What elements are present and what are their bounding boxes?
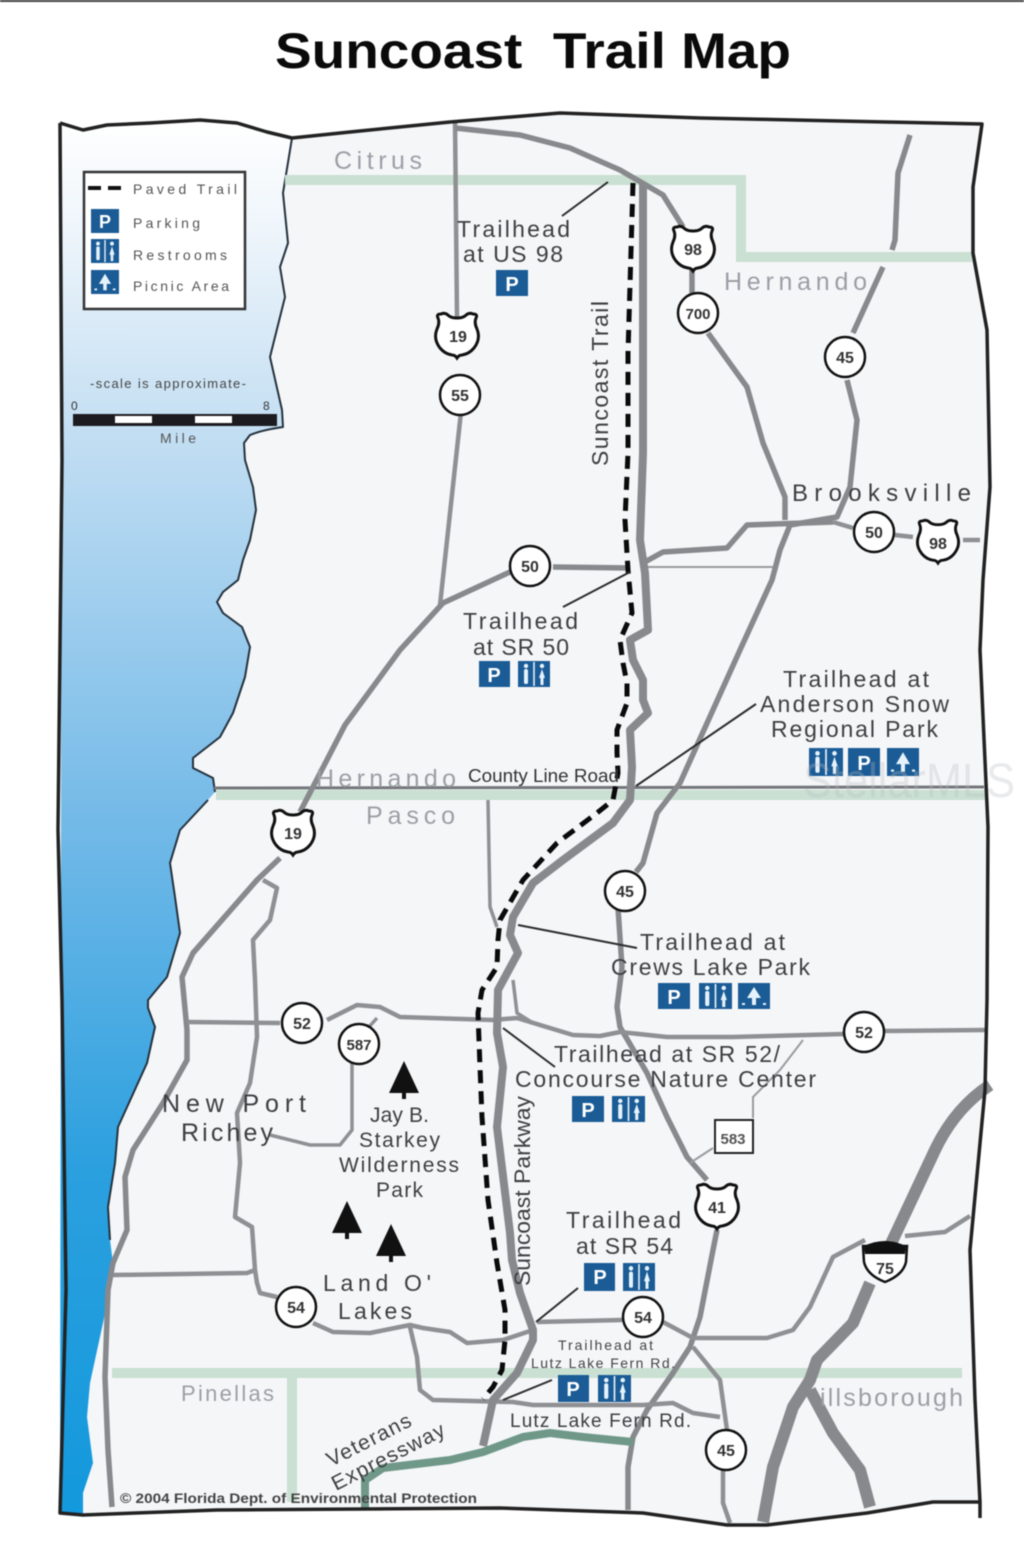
label: Trailhead at Anderson Snow Regional Park (760, 666, 949, 776)
label: Suncoast Trail (vertical): Suncoast Trail (587, 301, 613, 466)
legend: P (99, 212, 111, 232)
label: Trailhead at SR 54 (566, 1207, 681, 1291)
route markers: 75 (876, 1261, 894, 1278)
route markers: 50 (521, 559, 539, 576)
leader lines (503, 182, 756, 1400)
label: Trailhead at SR 52 / Concourse Nature Center (515, 1041, 816, 1122)
scale bar: 0 (71, 399, 78, 413)
route markers: 45 (836, 350, 854, 367)
label: Land O' Lakes (323, 1270, 431, 1324)
scale bar: -scale is approximate- (90, 376, 246, 391)
route markers: 54 (634, 1310, 652, 1327)
label: Trailhead at Lutz Lake Fern Rd.: Lutz Lake Fern Rd. (531, 1355, 675, 1371)
scale bar: Mile (160, 430, 196, 446)
water: Gulf of Mexico (60, 120, 292, 1514)
label: Jay B. Starkey Wilderness Park: Wilderness (339, 1154, 459, 1177)
county labels: Hernando (316, 765, 456, 793)
route markers: 45 (717, 1443, 735, 1460)
legend: Restrooms (133, 247, 227, 263)
label: Lutz Lake Fern Rd.: Lutz Lake Fern Rd. (510, 1411, 691, 1432)
label: Trailhead at Crews Lake Park (611, 929, 810, 1009)
label: Trailhead at Anderson Snow Regional Park: Regional Park (771, 716, 938, 742)
scale bar (71, 376, 277, 446)
label: Suncoast Parkway (vertical): Suncoast Parkway (510, 1096, 535, 1286)
label: Jay B. Starkey Wilderness Park: Park (376, 1179, 424, 1202)
label: Trailhead at Anderson Snow Regional Park: Trailhead at (783, 666, 930, 692)
label: Jay B. Starkey Wilderness Park (339, 1104, 459, 1202)
label: New Port Richey: New Port (162, 1090, 306, 1118)
road network (105, 120, 990, 1523)
scale bar: 8 (263, 399, 270, 413)
label: County Line Road: County Line Road (468, 766, 619, 786)
label: Trailhead at SR 52 / Concourse Nature Center: Trailhead at SR 52/ (554, 1041, 781, 1067)
county labels: Pinellas (181, 1381, 274, 1406)
label: Trailhead at SR 52 / Concourse Nature Center: Concourse Nature Center (515, 1066, 816, 1092)
county labels: Pasco (366, 802, 455, 830)
legend: Paved Trail (133, 181, 237, 197)
label: Jay B. Starkey Wilderness Park: Jay B. (370, 1104, 429, 1127)
coastline outline (108, 138, 292, 1240)
route markers: 54 (287, 1300, 305, 1317)
label: Trailhead at Crews Lake Park: P (667, 987, 681, 1009)
label: Trailhead at SR 50: at SR 50 (473, 634, 569, 660)
Suncoast Parkway road (483, 183, 648, 1446)
label: Trailhead at US 98: at US 98 (463, 241, 563, 267)
label: Trailhead at SR 54: at SR 54 (576, 1233, 673, 1259)
legend (84, 172, 245, 309)
route markers: 98 (684, 242, 702, 259)
copyright: © 2004 Florida Dept. of Environmental Protection (120, 1490, 477, 1506)
paved trail: dashed line (478, 183, 633, 1399)
legend: Picnic Area (133, 278, 229, 294)
label: Trailhead at SR 50 (463, 608, 578, 687)
label: Trailhead at US 98 (457, 216, 570, 296)
label: Brooksville: Brooksville (792, 480, 971, 507)
route markers: 50 (865, 525, 883, 542)
county boundaries (112, 180, 985, 1502)
label: New Port Richey (162, 1090, 306, 1147)
route markers: 19 (284, 826, 302, 843)
label: Trailhead at Crews Lake Park: Trailhead at (640, 929, 786, 955)
label: Trailhead at SR 52 / Concourse Nature Center: P (581, 1100, 595, 1122)
label: Trailhead at Anderson Snow Regional Park: Anderson Snow (760, 691, 949, 717)
legend: Parking (133, 215, 200, 231)
route markers: 19 (449, 329, 467, 346)
route markers: 41 (708, 1200, 726, 1217)
label: Trailhead at Lutz Lake Fern Rd. (531, 1337, 675, 1402)
route markers: 55 (451, 388, 469, 405)
label: Trailhead at SR 54: P (593, 1267, 607, 1289)
label: Trailhead at SR 50: P (487, 665, 501, 687)
label: Trailhead at SR 54: Trailhead (566, 1207, 681, 1233)
route markers: 98 (929, 536, 947, 553)
label: Trailhead at US 98: Trailhead (457, 216, 570, 242)
route markers: 52 (293, 1016, 311, 1033)
county labels: Citrus (334, 147, 422, 175)
label: Trailhead at Crews Lake Park: Crews Lake Park (611, 954, 810, 980)
label: Trailhead at Lutz Lake Fern Rd.: P (566, 1379, 580, 1401)
label: Land O' Lakes: Lakes (338, 1298, 412, 1324)
label: Trailhead at Lutz Lake Fern Rd.: Trailhead at (558, 1337, 653, 1353)
label: New Port Richey: Richey (181, 1119, 274, 1147)
county labels (181, 147, 963, 1412)
label: Jay B. Starkey Wilderness Park: Starkey (359, 1129, 440, 1152)
label: Trailhead at SR 50: Trailhead (463, 608, 578, 634)
route markers (272, 226, 959, 1470)
route markers: 583 (720, 1131, 746, 1148)
label: Trailhead at Anderson Snow Regional Park: P (857, 753, 871, 775)
County Line Road (214, 787, 984, 788)
label: Veterans Expressway: Veterans (323, 1409, 415, 1471)
label: Land O' Lakes: Land O' (323, 1270, 431, 1296)
county labels: Hernando (724, 268, 867, 296)
label: Veterans Expressway: Expressway (328, 1418, 449, 1495)
route markers: 587 (346, 1037, 372, 1054)
route markers: 52 (855, 1025, 873, 1042)
park trees (332, 1061, 419, 1262)
label: Trailhead at US 98: P (505, 274, 519, 296)
county labels: illsborough (820, 1384, 963, 1412)
title: Suncoast Trail Map (275, 23, 791, 79)
route markers: 45 (616, 884, 634, 901)
route markers: 700 (685, 306, 711, 323)
